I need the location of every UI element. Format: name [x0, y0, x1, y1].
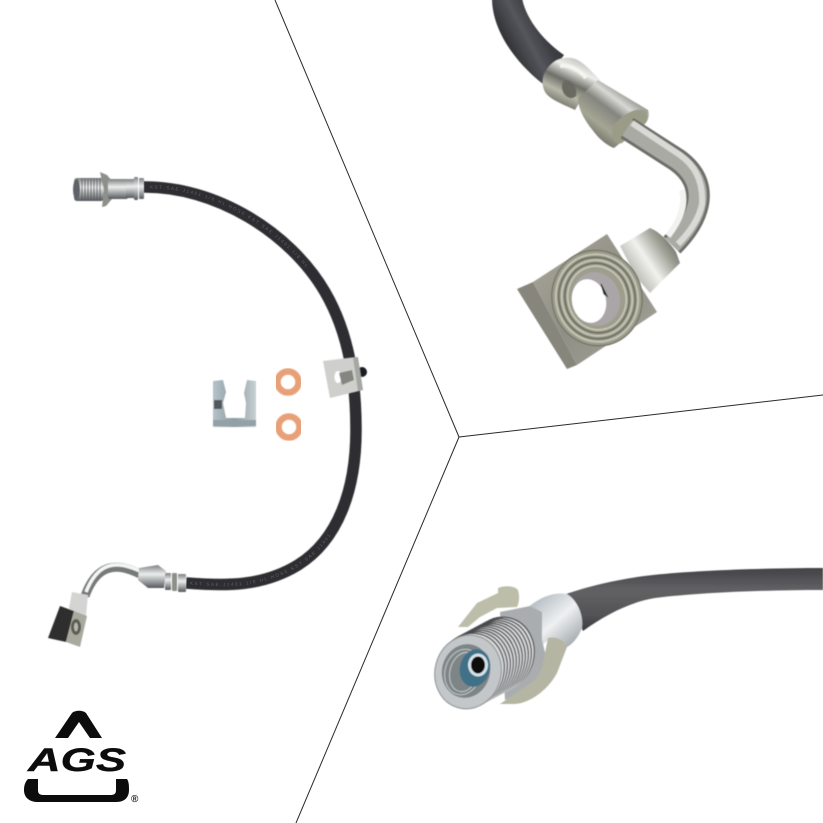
registered mark: ® — [131, 794, 139, 805]
top threaded end fitting — [73, 172, 144, 207]
hose body — [143, 180, 363, 592]
logo wordmark: AGS — [27, 742, 127, 778]
threaded barrel — [430, 610, 542, 714]
panel dividers — [275, 0, 823, 823]
AGS logo — [24, 711, 139, 805]
inner bore — [468, 654, 488, 676]
copper washers — [278, 372, 300, 438]
bottom banjo fitting — [48, 565, 186, 647]
panel: close-up banjo end — [492, 0, 702, 369]
panel: full brake hose assembly — [47, 172, 368, 648]
banjo bore — [566, 267, 626, 331]
mounting clip — [213, 380, 256, 427]
logo top chevron — [55, 711, 102, 738]
hex body — [500, 606, 548, 700]
crimp sleeve — [525, 594, 582, 650]
bracket clip on hose — [323, 357, 367, 398]
machined rings — [541, 240, 653, 356]
tube nut — [620, 228, 680, 293]
ferrule — [578, 80, 649, 148]
panel: close-up threaded end — [427, 568, 823, 716]
upper clip tab — [458, 586, 519, 627]
hose body: KST SAE J1401 1/8 HL HOSE KST SAE J1401 1/8 HL — [150, 185, 307, 268]
hose section — [492, 0, 564, 84]
hose section — [566, 568, 823, 631]
banjo block — [517, 282, 577, 369]
crimp collars — [543, 58, 600, 110]
logo bottom bracket — [24, 779, 129, 802]
hose body: KST SAE J1401 1/8 HL HOSE KST SAE J1401 — [190, 534, 330, 586]
ferrule end face — [612, 110, 648, 143]
lower clip tab — [500, 637, 567, 704]
end face — [427, 628, 509, 716]
bent tube — [627, 123, 702, 245]
